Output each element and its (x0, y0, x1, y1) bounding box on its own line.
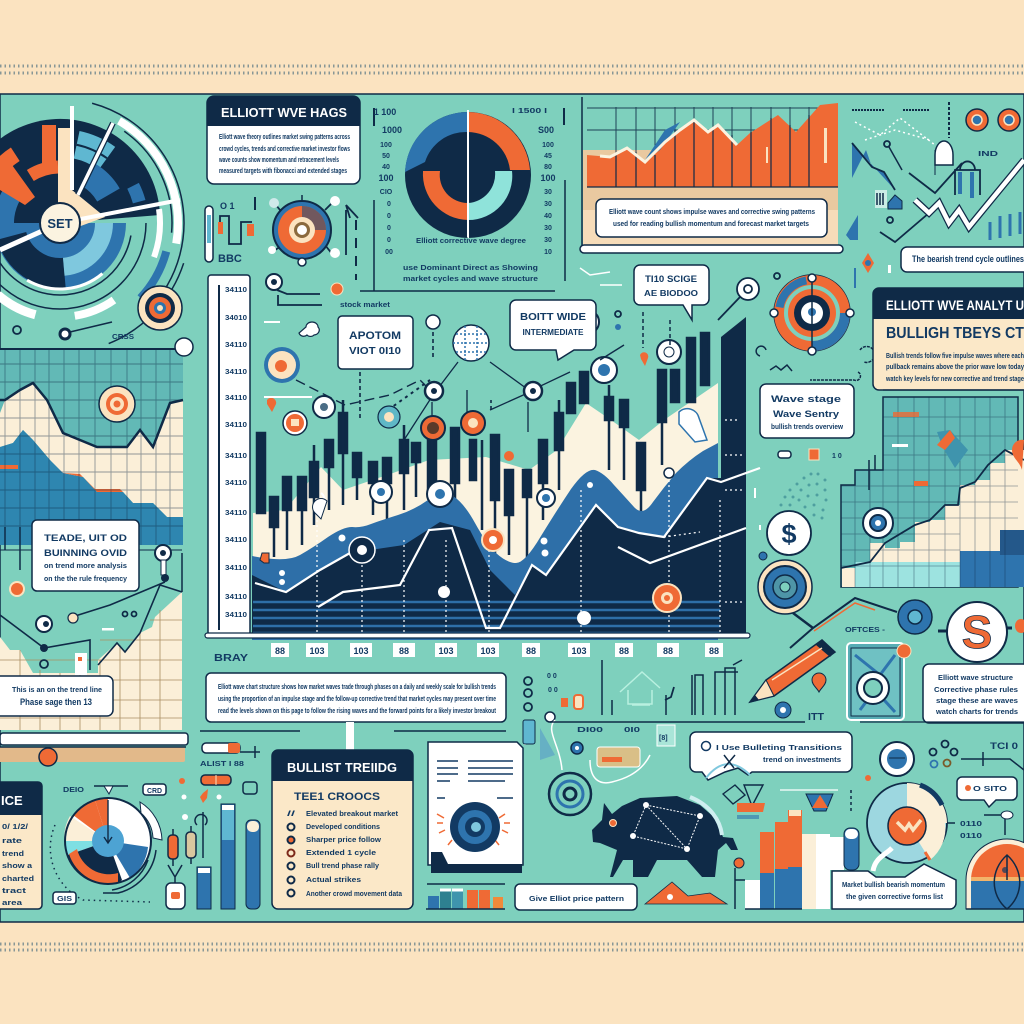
x axis labels (271, 643, 723, 657)
text box: trend callout: on the the rule frequency (44, 576, 127, 583)
panel: ICE bottom left: charted (2, 876, 34, 883)
line chart with S coin: S (962, 606, 992, 658)
callout: center bottom speech bubble: I Use Bulleting Transitions (716, 745, 842, 752)
text block: Elliott description (218, 134, 350, 175)
chart markers and nodes (260, 310, 707, 625)
radial gauge: top left (0, 59, 224, 387)
icon: central target with nodes (268, 195, 358, 280)
icons: upper-right lower cluster: TCI 0 (990, 741, 1018, 751)
callout: Apotom (338, 316, 413, 369)
axis panel: 34010 (225, 313, 247, 322)
panel: ICE bottom left: 0/ 1/2/ (2, 824, 28, 831)
axis numbers left: 100 (380, 142, 392, 149)
axis numbers left: 0 (387, 237, 391, 244)
axis numbers right: 100 (542, 142, 554, 149)
bullet list: Developed conditions (306, 824, 380, 831)
x axis labels: 103 (438, 646, 454, 656)
callout: wave speech bubble: INTERMEDIATE (522, 328, 584, 337)
axis panel: 34110 (225, 610, 247, 619)
icons: dollar coin, magnifier and halftone: $ (781, 519, 797, 549)
panel: card icon (847, 643, 911, 720)
bullet list: // (287, 811, 295, 818)
donut: lower right with check (867, 783, 955, 871)
text box: right lower: Corrective phase rules (934, 687, 1018, 694)
icon: small candle bars: O 1 (220, 201, 235, 211)
text block: Elliott description: crowd cycles, trends and corrective market investor flows (219, 146, 350, 153)
main candlestick chart (205, 275, 760, 664)
text box: lower right callout: Market bullish bearish momentum (842, 882, 945, 889)
small marks near target (756, 253, 891, 380)
axis panel: 34110 (225, 451, 247, 460)
icons: two orange coins (966, 109, 1020, 131)
stripes (253, 602, 720, 633)
text box: bullet callout right of chart (760, 384, 854, 438)
bar chart: bottom left bars and candles (166, 743, 260, 909)
line chart with S coin (790, 598, 1024, 662)
zigzag chart: top right: IND (978, 151, 998, 158)
pie chart: bottom left (50, 784, 166, 904)
text box: orange chart caption (596, 199, 827, 237)
bullet list: Actual strikes (306, 877, 361, 884)
x axis labels: 103 (480, 646, 496, 656)
panel: ICE bottom left: ICE (1, 793, 23, 808)
icon: small candle bars (205, 197, 255, 265)
radial gauge: top left: SET (47, 216, 73, 231)
pie chart: central donut (360, 107, 565, 291)
axis numbers left (374, 107, 402, 256)
bullet list: Another crowd movement data (306, 891, 402, 898)
axis numbers left: 1 100 (374, 107, 396, 117)
icon: pin and labelled link: stock market (340, 302, 391, 309)
callout: wave speech bubble: BOITT WIDE (520, 312, 586, 323)
text box: bullet callout right of chart: Wave Sentry (773, 409, 839, 419)
dark column (721, 317, 746, 636)
x axis labels: 88 (709, 646, 719, 656)
axis numbers right: 10 (544, 249, 552, 256)
text box: right lower (923, 664, 1024, 723)
axis numbers right: 30 (544, 189, 552, 196)
axis panel: 34110 (225, 478, 247, 487)
subheading: TEE1 CROOCS (294, 791, 380, 803)
bar chart: mini bars under document (426, 890, 505, 909)
x axis labels: 103 (309, 646, 325, 656)
x axis labels: 88 (399, 646, 409, 656)
heading: bullish trending: BULLIST TREIIDG (287, 760, 397, 775)
axis panel: 34110 (225, 592, 247, 601)
text block: Elliott description: measured targets with fibonacci and extended stages (219, 168, 347, 175)
axis numbers left: 0 (387, 213, 391, 220)
baseline (205, 633, 750, 638)
icons: upper-right lower cluster: 0110 (960, 833, 982, 840)
candlesticks (257, 333, 709, 560)
bullet list: Extended 1 cycle (306, 850, 376, 857)
axis numbers left: 1000 (382, 125, 402, 135)
axis numbers right (538, 125, 556, 256)
icons: upper-right lower cluster: 0110 (960, 821, 982, 828)
left lower grid chart with connectors (0, 527, 188, 766)
axis numbers right: 30 (544, 225, 552, 232)
x axis labels: 103 (571, 646, 587, 656)
icons: dollar coin, magnifier and halftone (755, 449, 842, 628)
callout: center bottom speech bubble (690, 732, 852, 780)
connector marks near bubbles (580, 268, 780, 360)
panel: Elliott wave heading card (207, 96, 360, 184)
blue area (252, 443, 718, 640)
axis numbers right: 30 (544, 201, 552, 208)
callout: Apotom: APOTOM (349, 330, 401, 342)
panel: ICE bottom left: tract (2, 888, 27, 895)
line chart with S coin: OFTCES - (845, 627, 886, 634)
text box: bullet callout right of chart: Wave stage (771, 394, 841, 404)
text box: lower right callout: the given corrective forms list (846, 894, 944, 901)
axis numbers right: S00 (538, 125, 554, 135)
text box: bottom center note (200, 673, 506, 750)
axis panel: 34110 (225, 285, 247, 294)
axis numbers left: 0 (387, 225, 391, 232)
text box: top right caption (901, 247, 1024, 272)
donut caption: market cycles and wave structure (403, 276, 538, 283)
text box: bottom center note: read the levels shown on this page to follow the rising waves and the forward points for a likely investor breakout (218, 708, 496, 715)
x axis labels: 88 (526, 646, 536, 656)
axis numbers left: 40 (382, 164, 390, 171)
text box: trend callout: TEADE, UIT OD (44, 533, 128, 543)
text block: Elliott description: wave counts show momentum and retracement levels (218, 157, 339, 164)
panel: orange area chart top (580, 97, 843, 253)
axis panel: 34110 (225, 393, 247, 402)
text block: analysis body (885, 353, 1024, 383)
text box: orange chart caption: Elliott wave count shows impulse waves and corrective swing patterns (609, 209, 815, 216)
text box: lower right callout (832, 864, 956, 909)
text box: trend callout (32, 520, 139, 591)
x axis labels: 88 (275, 646, 285, 656)
icon: pencil (750, 640, 835, 702)
chart: half-round orange and blue (966, 839, 1024, 909)
text box: bottom center note: using the proportion of an impulse stage and the follow-up corrective trend that market cycles may present over time (218, 696, 496, 703)
speech bubble: small right (957, 777, 1017, 807)
axis numbers left: 100 (378, 173, 394, 183)
donut caption (403, 238, 538, 283)
pie chart: bottom left: DEIO (63, 787, 85, 794)
text box: lower chart note: This is an on the trend line (12, 687, 102, 694)
callout: Apotom: VIOT 0I10 (349, 346, 401, 357)
icon: pin and labelled link (266, 274, 391, 309)
text box: right lower: Elliott wave structure (938, 675, 1013, 682)
text box: right lower: stage these are waves (936, 698, 1018, 705)
axis numbers right: 45 (544, 153, 552, 160)
icon: small candle bars: BBC (218, 253, 242, 265)
bullet list: Bull trend phase rally (306, 863, 379, 870)
axis panel: 34110 (225, 535, 247, 544)
callout: top speech bubble: AE BIODOO (644, 289, 698, 298)
panel: right stair chart (841, 390, 1024, 587)
axis numbers left: CIO (380, 189, 393, 196)
icon: swirl and note tag: [8] (659, 735, 668, 742)
bullet list (287, 811, 402, 898)
icons: small shapes above bars (723, 775, 871, 819)
panel: ICE bottom left: area (2, 900, 22, 907)
text box: trend callout: on trend more analysis (44, 563, 127, 570)
text box: lower chart note (0, 676, 113, 716)
text box: small caption (515, 884, 637, 910)
bullet list: Sharper price follow (306, 837, 382, 844)
bullet list: Elevated breakout market (306, 811, 399, 818)
cream price mountain (253, 383, 718, 600)
x axis labels: 88 (663, 646, 673, 656)
x axis labels: 103 (353, 646, 369, 656)
text box: small caption: Give Elliot price pattern (529, 896, 624, 903)
panel: Elliott wave analysis (873, 288, 1024, 390)
text box: bullet callout right of chart: bullish trends overview (771, 424, 844, 431)
icons: upper-right lower cluster (880, 740, 1024, 840)
axis panel: 34110 (225, 563, 247, 572)
text box: trend callout: BUINNING OVID (44, 548, 128, 558)
axis numbers right: 100 (540, 173, 556, 183)
panel: ICE bottom left: trend (2, 851, 24, 858)
panel: bullish trending (272, 750, 413, 909)
axis panel: 34110 (225, 367, 247, 376)
icon: orange mountain (645, 882, 727, 904)
axis numbers left: 00 (385, 249, 393, 256)
icon: swirl and note tag: DI00 (577, 727, 603, 734)
panel: ICE bottom left: show a (2, 863, 32, 870)
axis numbers right: 30 (544, 237, 552, 244)
text box: orange chart caption: used for reading bullish momentum and forecast market targets (613, 221, 809, 228)
panel: ICE bottom left (0, 782, 42, 909)
heading: Elliott wave: ELLIOTT WVE HAGS (221, 105, 347, 120)
axis numbers right: 80 (544, 164, 552, 171)
radial gauge: top left: CRSS (112, 334, 134, 341)
callout: top speech bubble: TI10 SCIGE (645, 274, 697, 284)
panel: left mid grid chart (0, 338, 193, 545)
line icons: house and chart (524, 660, 1024, 723)
icon: swirl and note tag (523, 712, 675, 815)
axis panel: 34110 (225, 420, 247, 429)
bar chart: bottom left bars and candles: ALIST I 88 (200, 761, 244, 768)
axis numbers left: 0 (387, 201, 391, 208)
axis numbers left: 50 (382, 153, 390, 160)
bar chart: orange and blue bars (734, 810, 859, 909)
icon: right orange ring target (770, 274, 854, 355)
text box: right lower: watch charts for trends (935, 709, 1018, 716)
main candlestick chart: BRAY (214, 653, 248, 664)
pie chart: central donut: I 1500 I (512, 108, 547, 115)
line icons: house and chart: 0 0 (547, 673, 557, 680)
line icons: house and chart: ITT (808, 712, 824, 723)
donut caption: use Dominant Direct as Showing (403, 265, 538, 272)
line icons: house and chart: 0 0 (548, 687, 558, 694)
icon: bull silhouette (592, 796, 738, 877)
x axis labels: 88 (619, 646, 629, 656)
speech bubble: small right: O SITO (973, 786, 1008, 793)
icon: target on chart (99, 386, 135, 422)
pie chart: bottom left: CRD (147, 788, 162, 795)
callout: center bottom speech bubble: trend on investments (763, 757, 841, 764)
donut caption: Elliott corrective wave degree (416, 238, 526, 245)
icon: small orange target under gauge (138, 286, 182, 330)
zigzag chart: top right (846, 102, 1024, 242)
white price lines (255, 468, 760, 628)
text box: bottom center note: Elliott wave chart structure shows how market waves trade through phases on a daily and weekly scale for bullish trends (218, 684, 496, 691)
text block: Elliott description: Elliott wave theory outlines market swing patterns across (219, 134, 350, 141)
axis panel: 34110 (225, 340, 247, 349)
panel: document with seal (427, 742, 523, 884)
axis panel (208, 275, 250, 635)
panel: ICE bottom left: rate (2, 838, 22, 845)
text box: lower chart note: Phase sage then 13 (20, 697, 92, 707)
navy area (252, 478, 745, 636)
callout: wave speech bubble (510, 300, 596, 360)
axis numbers right: 40 (544, 213, 552, 220)
callout: top speech bubble (634, 265, 709, 320)
icons: dollar coin, magnifier and halftone: 1 0 (832, 453, 842, 460)
axis panel: 34110 (225, 508, 247, 517)
pie chart: bottom left: GIS (57, 896, 72, 903)
icon: swirl and note tag: 0I0 (624, 727, 640, 734)
